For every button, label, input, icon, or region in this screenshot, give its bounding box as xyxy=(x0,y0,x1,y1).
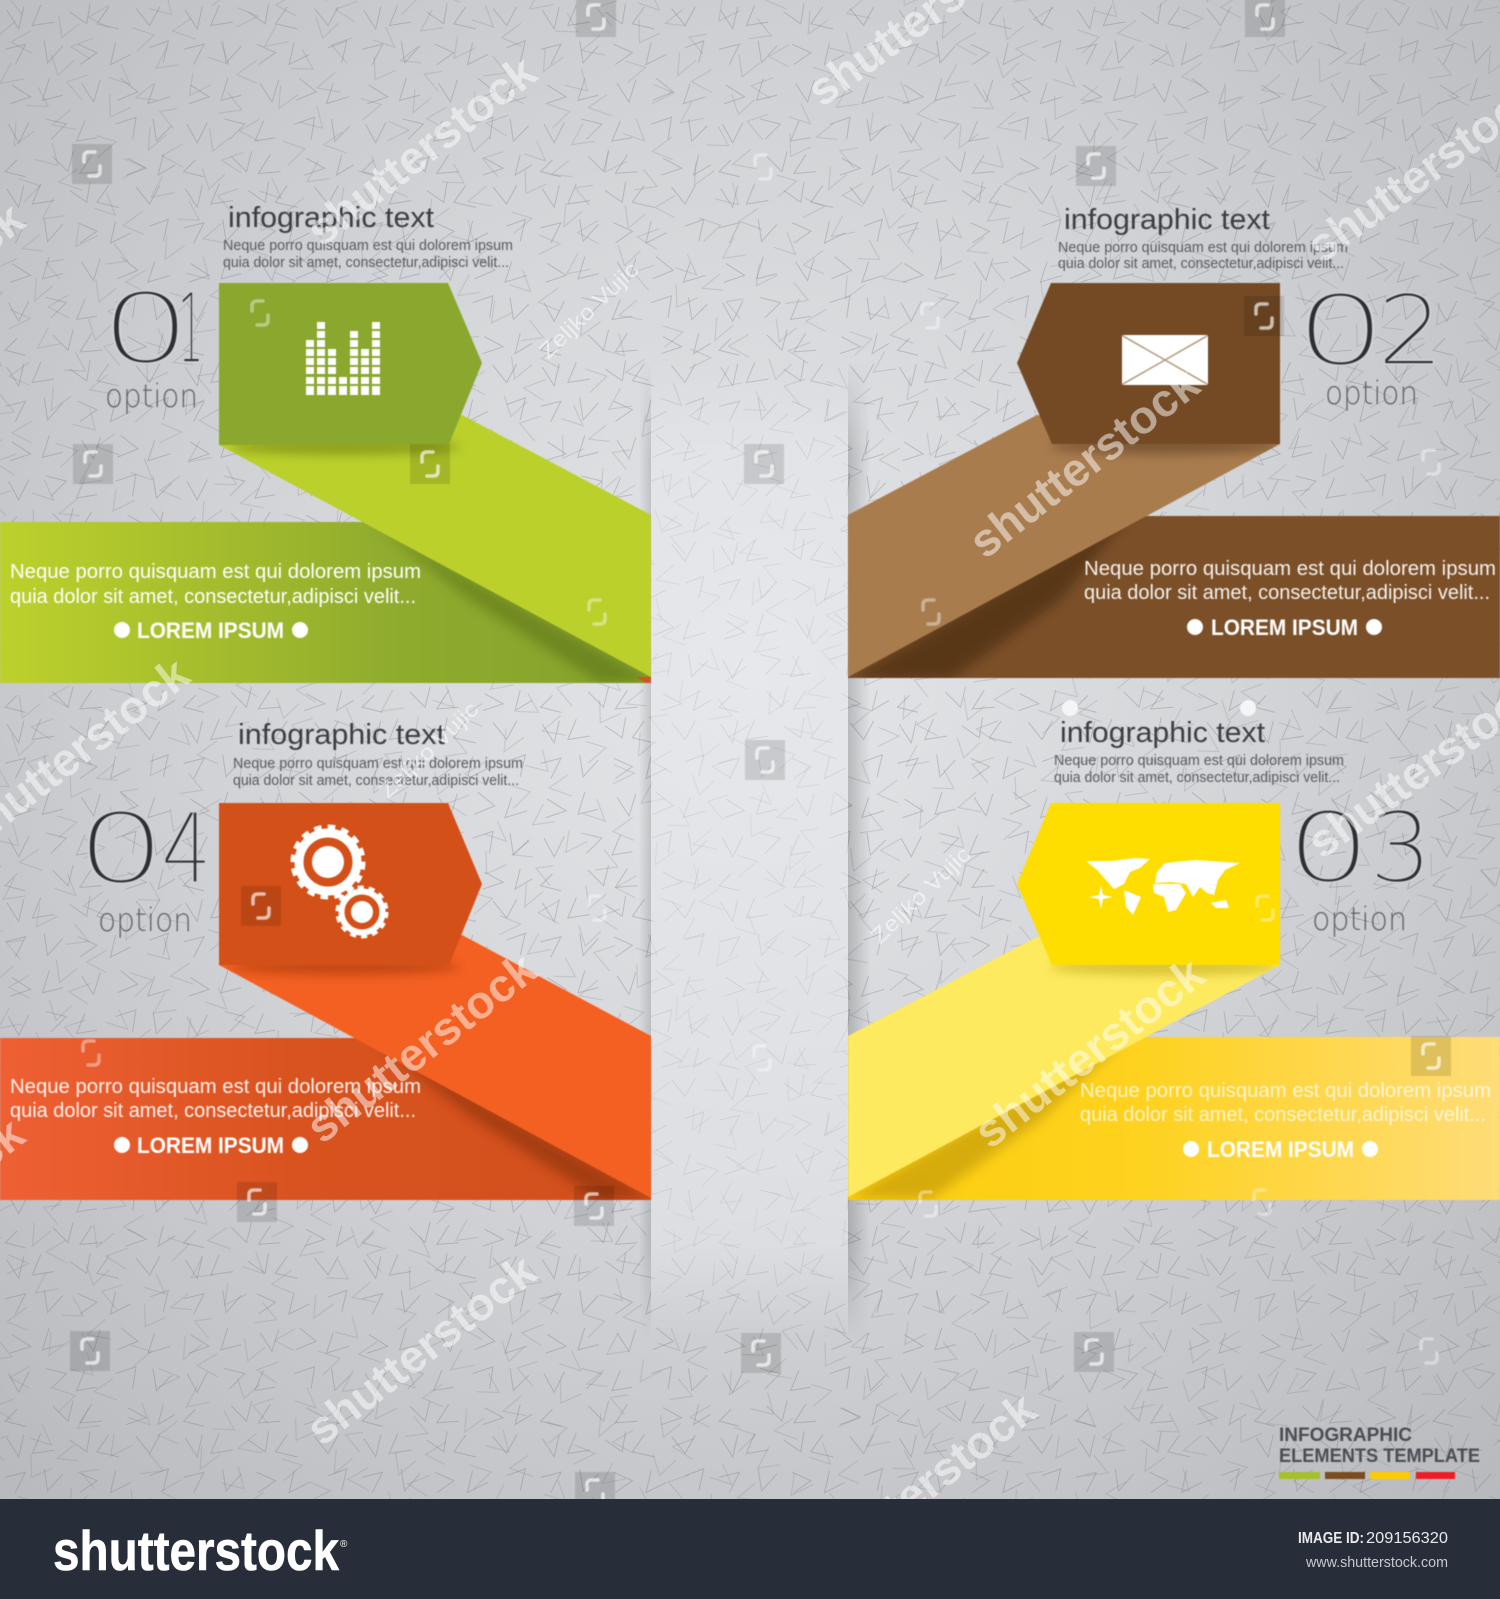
number 01: 0 xyxy=(100,273,192,385)
banner text 01: Neque porro quisquam est qui dolorem ipsum xyxy=(10,561,421,583)
button 03: LOREM IPSUM xyxy=(1207,1137,1354,1162)
decorative dots xyxy=(1062,700,1256,716)
banner shadow 04 xyxy=(396,1062,646,1200)
description 03: quia dolor sit amet, consectetur,adipisci velit... xyxy=(1054,770,1340,786)
option label 03: option xyxy=(1312,900,1407,938)
number 04: 0 xyxy=(76,793,166,905)
ribbon 01 xyxy=(219,415,651,677)
watermark text: Zeljko Vujic xyxy=(374,697,484,804)
banner 03 xyxy=(848,1037,1500,1200)
description 04: Neque porro quisquam est qui dolorem ipsum xyxy=(233,756,523,772)
template caption xyxy=(1279,1425,1480,1479)
description 02: quia dolor sit amet, consectetur,adipisci velit... xyxy=(1058,256,1344,272)
template caption: INFOGRAPHIC xyxy=(1279,1425,1412,1446)
tab 04 xyxy=(219,803,482,965)
heading 02: infographic text xyxy=(1064,204,1270,236)
ribbon shadow 02 xyxy=(1050,438,1280,454)
banner text 03: Neque porro quisquam est qui dolorem ipsum xyxy=(1080,1080,1491,1102)
banner shadow 03 xyxy=(854,1055,1114,1200)
number 02: 2 xyxy=(1377,275,1444,387)
icon: envelope xyxy=(1122,335,1208,385)
tab 03 xyxy=(1017,803,1280,965)
icon: gears xyxy=(293,827,386,936)
panel: option 04 xyxy=(0,719,651,1200)
icon: bar chart xyxy=(306,322,380,395)
ribbon shadow 01 xyxy=(230,439,460,455)
watermark text: shutterstock xyxy=(796,1382,1046,1593)
banner 02 xyxy=(848,516,1500,678)
ribbon shadow 04 xyxy=(230,959,460,975)
banner shadow 01 xyxy=(392,539,644,683)
footer url: www.shutterstock.com xyxy=(1305,1554,1448,1571)
panel: option 01 xyxy=(0,202,651,683)
ribbon 04 xyxy=(219,935,651,1198)
center strip xyxy=(639,360,870,1340)
tab 01 xyxy=(219,283,482,445)
ribbon 02 xyxy=(848,415,1280,677)
watermark text: shutterstock xyxy=(964,947,1214,1158)
banner text 01: quia dolor sit amet, consectetur,adipisci velit... xyxy=(10,586,416,608)
banner text 04: Neque porro quisquam est qui dolorem ipsum xyxy=(10,1076,421,1098)
number 03 xyxy=(1286,792,1433,905)
heading 04: infographic text xyxy=(238,719,445,751)
image id: 209156320 xyxy=(1366,1530,1448,1547)
number 04 xyxy=(76,793,212,905)
panel: option 02 xyxy=(848,204,1500,680)
icon: world map xyxy=(1086,858,1240,915)
watermark text: shutterstock xyxy=(296,1244,546,1455)
watermark text: Zeljko Vujic xyxy=(866,842,976,949)
ribbon 03 xyxy=(848,937,1280,1197)
number 03: 3 xyxy=(1369,793,1433,905)
panel: option 03 xyxy=(848,700,1500,1200)
button 04: LOREM IPSUM xyxy=(137,1133,284,1158)
watermark text: shutterstock xyxy=(959,357,1209,568)
option label 02: option xyxy=(1325,374,1418,412)
heading 03: infographic text xyxy=(1060,717,1265,749)
number 02: 0 xyxy=(1295,275,1387,387)
description 04: quia dolor sit amet, consectetur,adipisci velit... xyxy=(233,773,519,789)
template caption: ELEMENTS TEMPLATE xyxy=(1279,1446,1480,1467)
button 01: LOREM IPSUM xyxy=(137,618,284,643)
fold corner 01 xyxy=(636,677,651,683)
banner shadow 02 xyxy=(854,531,1121,678)
banner text 02: Neque porro quisquam est qui dolorem ipsum xyxy=(1084,558,1496,580)
description 01: Neque porro quisquam est qui dolorem ipsum xyxy=(223,238,513,254)
heading 01: infographic text xyxy=(228,202,434,234)
banner text 02: quia dolor sit amet, consectetur,adipisci velit... xyxy=(1084,582,1490,604)
banner text 04: quia dolor sit amet, consectetur,adipisci velit... xyxy=(10,1100,416,1122)
footer registered mark: ® xyxy=(340,1539,348,1550)
footer bar xyxy=(0,1499,1500,1599)
description 02: Neque porro quisquam est qui dolorem ipsum xyxy=(1058,240,1348,256)
banner text 03: quia dolor sit amet, consectetur,adipisci velit... xyxy=(1080,1104,1486,1126)
description 03: Neque porro quisquam est qui dolorem ipsum xyxy=(1054,753,1344,769)
number 04: 4 xyxy=(161,793,212,905)
description 01: quia dolor sit amet, consectetur,adipisci velit... xyxy=(223,255,509,271)
option label 01: option xyxy=(105,377,198,415)
watermark text: shutterstock xyxy=(296,942,546,1153)
number 03: 0 xyxy=(1286,792,1372,904)
tab 02 xyxy=(1017,283,1280,444)
button 02: LOREM IPSUM xyxy=(1211,615,1358,640)
watermark text: shutterstock xyxy=(296,45,546,256)
image id: IMAGE ID: xyxy=(1298,1530,1364,1547)
number 02 xyxy=(1295,275,1444,387)
footer logo: shutterstock xyxy=(53,1519,340,1582)
number 01: 1 xyxy=(178,275,204,385)
ribbon shadow 03 xyxy=(1052,964,1276,979)
banner 01 xyxy=(0,522,651,683)
watermark text: Zeljko Vujic xyxy=(534,257,644,364)
banner 04 xyxy=(0,1038,651,1200)
option label 04: option xyxy=(98,901,192,939)
